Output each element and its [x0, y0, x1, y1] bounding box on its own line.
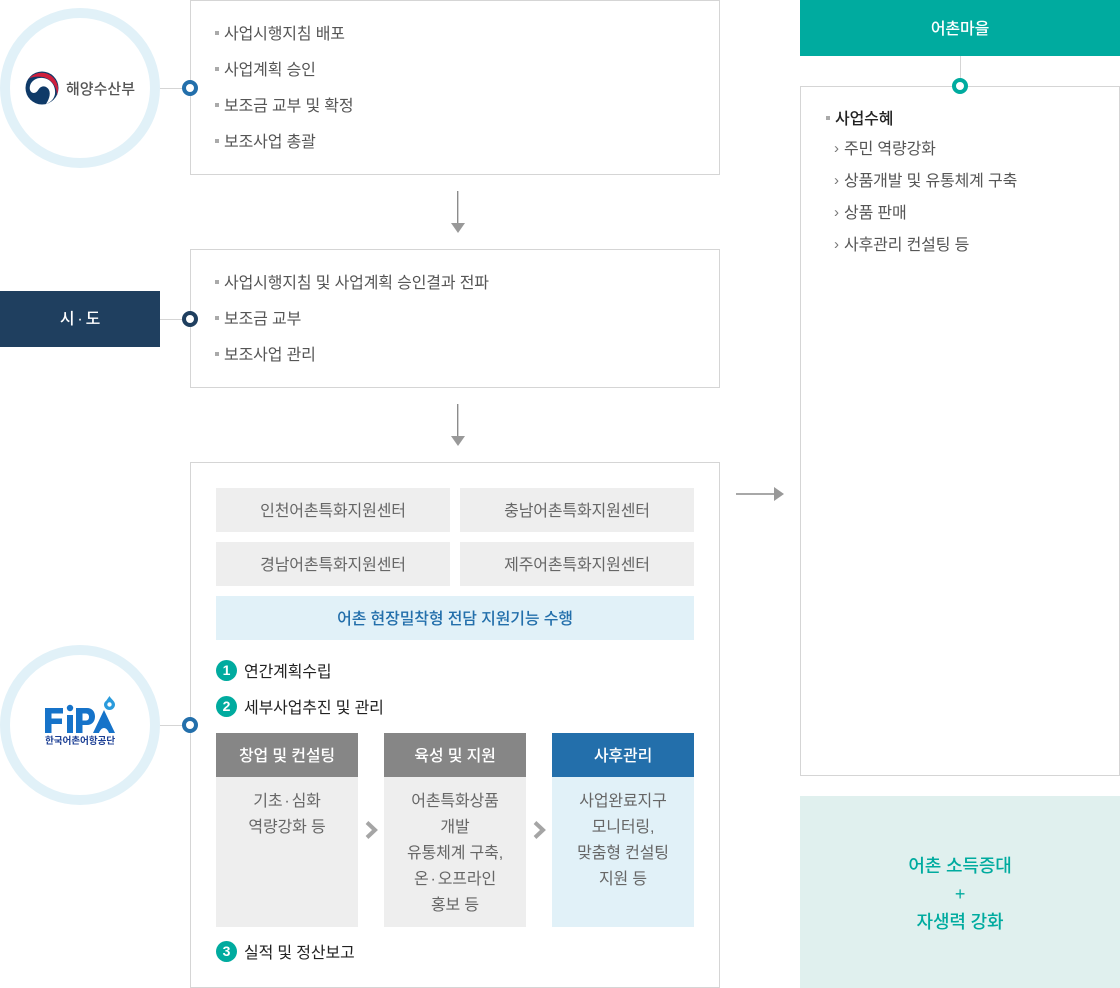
connector dot: ministry [182, 80, 198, 96]
column: aftercare [552, 733, 694, 927]
ministry task list: 보조사업 총괄 [224, 134, 316, 151]
column body: 온·오프라인 [414, 871, 496, 888]
support function banner [216, 596, 694, 640]
province task list: 보조사업 관리 [224, 347, 316, 364]
column body [552, 777, 694, 927]
column body: 역량강화 등 [248, 819, 326, 836]
column heading [552, 733, 694, 777]
column body: 모니터링, [592, 819, 654, 836]
ministry name: 해양수산부 [66, 81, 135, 98]
center: Chungnam: 충남어촌특화지원센터 [504, 503, 650, 520]
province label: 시·도 [60, 311, 100, 328]
center: Jeju [460, 542, 694, 586]
panel: outcome: + [955, 884, 965, 904]
support function banner: 어촌 현장밀착형 전담 지원기능 수행 [337, 611, 573, 628]
step 3 number [216, 941, 237, 962]
benefit list: 사후관리 컨설팅 등 [844, 237, 969, 254]
icon: taegeuk emblem [26, 72, 58, 104]
step 2 label: 세부사업추진 및 관리 [244, 700, 384, 717]
FIPA circle logo [0, 645, 160, 805]
center: Gyeongnam [216, 542, 450, 586]
center: Jeju: 제주어촌특화지원센터 [504, 557, 650, 574]
column body: 기초·심화 [253, 793, 321, 810]
center: Chungnam [460, 488, 694, 532]
panel: outcome: 자생력 강화 [917, 912, 1003, 932]
ministry task list: 보조금 교부 및 확정 [224, 98, 353, 115]
panel: village benefits [800, 86, 1120, 776]
column body: 개발 [440, 819, 470, 836]
column heading: 사후관리 [594, 748, 652, 765]
province task list: 보조금 교부 [224, 311, 301, 328]
arrow: ministry to province [451, 191, 465, 233]
FIPA wordmark: 한국어촌어항공단 [45, 735, 115, 747]
province task list: 사업시행지침 및 사업계획 승인결과 전파 [224, 275, 489, 292]
column heading: 육성 및 지원 [414, 748, 496, 765]
step 1 label: 연간계획수립 [244, 664, 331, 681]
connector dot: FIPA [182, 717, 198, 733]
column body: 어촌특화상품 [411, 793, 499, 810]
column body: 사업완료지구 [579, 793, 667, 810]
ministry circle logo [0, 8, 160, 168]
panel: province tasks [190, 249, 720, 388]
benefit list [826, 110, 1017, 254]
column body [216, 777, 358, 927]
column heading: 창업 및 컨설팅 [239, 748, 335, 765]
column heading [216, 733, 358, 777]
step 1 number: 1 [223, 662, 230, 678]
column: startup consulting [216, 733, 358, 927]
benefit list: 사업수혜 [835, 111, 893, 128]
arrow: chevron 2 [534, 821, 546, 839]
step 2 number [216, 696, 237, 717]
column heading [384, 733, 526, 777]
village heading [800, 0, 1120, 56]
benefit list: 주민 역량강화 [844, 141, 936, 158]
benefit list: 상품개발 및 유통체계 구축 [844, 173, 1017, 190]
arrow: chevron 1 [366, 821, 378, 839]
ministry task list: 사업시행지침 배포 [224, 26, 345, 43]
column body: 지원 등 [599, 871, 647, 888]
step 1 [216, 660, 331, 681]
column body: 유통체계 구축, [407, 845, 503, 862]
step 3 label: 실적 및 정산보고 [244, 945, 355, 962]
province label [0, 291, 160, 347]
center: Incheon: 인천어촌특화지원센터 [260, 503, 406, 520]
step 2 [216, 696, 384, 717]
column body: 맞춤형 컨설팅 [577, 845, 669, 862]
center: Incheon [216, 488, 450, 532]
step 2 number: 2 [223, 698, 230, 714]
panel: ministry tasks [190, 0, 720, 175]
center: Gyeongnam: 경남어촌특화지원센터 [260, 557, 406, 574]
column: development and support [384, 733, 526, 927]
panel: outcome: 어촌 소득증대 [908, 856, 1012, 876]
province task list [215, 274, 489, 364]
panel: FIPA support centers [190, 462, 720, 988]
panel: outcome [800, 796, 1120, 988]
connector dot: province [182, 311, 198, 327]
village heading: 어촌마을 [931, 21, 989, 38]
step 3 number: 3 [223, 943, 230, 959]
column body: 홍보 등 [431, 897, 479, 914]
step 3 [216, 941, 355, 962]
step 1 number [216, 660, 237, 681]
ministry task list [215, 26, 353, 151]
column body [384, 777, 526, 927]
arrow: province to FIPA [451, 404, 465, 446]
benefit list: 상품 판매 [844, 205, 907, 222]
FIPA wordmark [45, 696, 115, 747]
arrow: FIPA to village [736, 487, 784, 501]
connector dot: village [952, 78, 968, 94]
ministry task list: 사업계획 승인 [224, 62, 316, 79]
